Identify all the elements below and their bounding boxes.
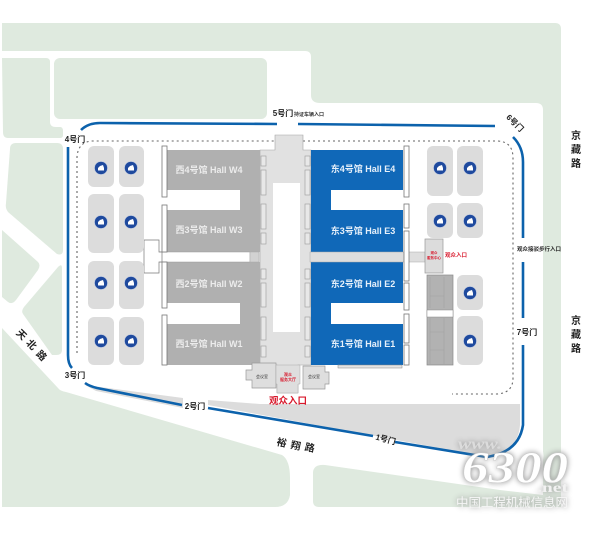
- gate labels: [65, 108, 561, 447]
- road: yuxiang: 裕: [275, 435, 288, 450]
- east hall bottom strip: [338, 365, 402, 368]
- pedestrian entrance: 观众接驳步行入口: [517, 245, 561, 253]
- east inner rooms: [305, 156, 310, 357]
- road: east upper: [571, 129, 581, 170]
- road: east lower: 路: [571, 342, 581, 355]
- road: east lower: 藏: [571, 329, 581, 341]
- visitor service hall: [276, 365, 300, 393]
- east visitor entrance: [425, 239, 467, 273]
- gate 5: [273, 108, 324, 118]
- road: east lower: 京: [571, 314, 581, 327]
- road: east upper: 京: [571, 129, 581, 142]
- road: east lower: [571, 314, 581, 355]
- west passage: [160, 252, 259, 262]
- icons: parking: [94, 162, 476, 348]
- gate 2: 2号门: [185, 401, 205, 411]
- gate 5: 5号门: [273, 108, 293, 118]
- label: hall E4: 东4号馆 Hall E4: [331, 163, 395, 174]
- panel: west halls: [144, 146, 266, 365]
- east hall block: [311, 150, 403, 365]
- east visitor entrance: 观众: [430, 250, 438, 255]
- gate 6: 6号门: [504, 112, 526, 134]
- visitor service hall: 服务大厅: [280, 376, 296, 382]
- watermark: 中国工程机械信息网: [456, 495, 568, 510]
- west meeting room: 会议室: [256, 373, 268, 379]
- west hall block: [167, 150, 260, 365]
- gate 7: 7号门: [517, 327, 537, 337]
- road: tianbei: 天: [13, 327, 29, 343]
- east grey building: [427, 275, 453, 365]
- road: yuxiang: [275, 435, 316, 455]
- east passage: [310, 252, 425, 262]
- panel: east halls: [305, 146, 425, 368]
- gate 5: 持证车辆入口: [294, 111, 324, 118]
- south entrance block: [246, 363, 329, 407]
- road: tianbei: 路: [33, 347, 50, 364]
- road: east upper: 藏: [571, 144, 581, 156]
- central concourse: [260, 135, 311, 393]
- label: hall W2: 西2号馆 Hall W2: [175, 278, 243, 289]
- watermark: 6300: [462, 443, 568, 492]
- east visitor entrance: 服务中心: [427, 255, 441, 260]
- road: tianbei: 北: [23, 337, 39, 353]
- east visitor entrance: 观众入口: [445, 252, 467, 259]
- apron in front of halls: [85, 385, 520, 457]
- label: hall E2: 东2号馆 Hall E2: [331, 278, 395, 289]
- inner dotted boundary: [77, 141, 513, 394]
- label: hall W1: 西1号馆 Hall W1: [175, 338, 243, 349]
- road: yuxiang: 路: [303, 440, 316, 455]
- watermark: [456, 436, 568, 510]
- label: hall W3: 西3号馆 Hall W3: [175, 224, 243, 235]
- watermark: .net: [537, 481, 568, 496]
- label: hall E3: 东3号馆 Hall E3: [331, 225, 395, 236]
- east meeting room: 会议室: [308, 373, 320, 379]
- gate 1: 1号门: [375, 432, 397, 447]
- east side strips: [404, 146, 409, 365]
- label: hall E1: 东1号馆 Hall E1: [331, 338, 395, 349]
- visitor service hall: 观众: [284, 371, 292, 377]
- label: hall W4: 西4号馆 Hall W4: [175, 164, 243, 175]
- gate 3: 3号门: [65, 370, 85, 380]
- west cross entrance: [144, 240, 162, 273]
- main visitor entrance label: 观众入口: [269, 396, 307, 407]
- gate 4: 4号门: [65, 134, 85, 144]
- road: yuxiang: 翔: [289, 438, 302, 453]
- road names: [13, 129, 581, 455]
- west side strips: [162, 146, 167, 365]
- watermark: www.: [458, 436, 502, 453]
- road: tianbei: [13, 327, 50, 364]
- west inner rooms: [261, 156, 266, 357]
- road: east upper: 路: [571, 157, 581, 170]
- parking pads: [88, 146, 483, 365]
- boundary road: [68, 123, 523, 457]
